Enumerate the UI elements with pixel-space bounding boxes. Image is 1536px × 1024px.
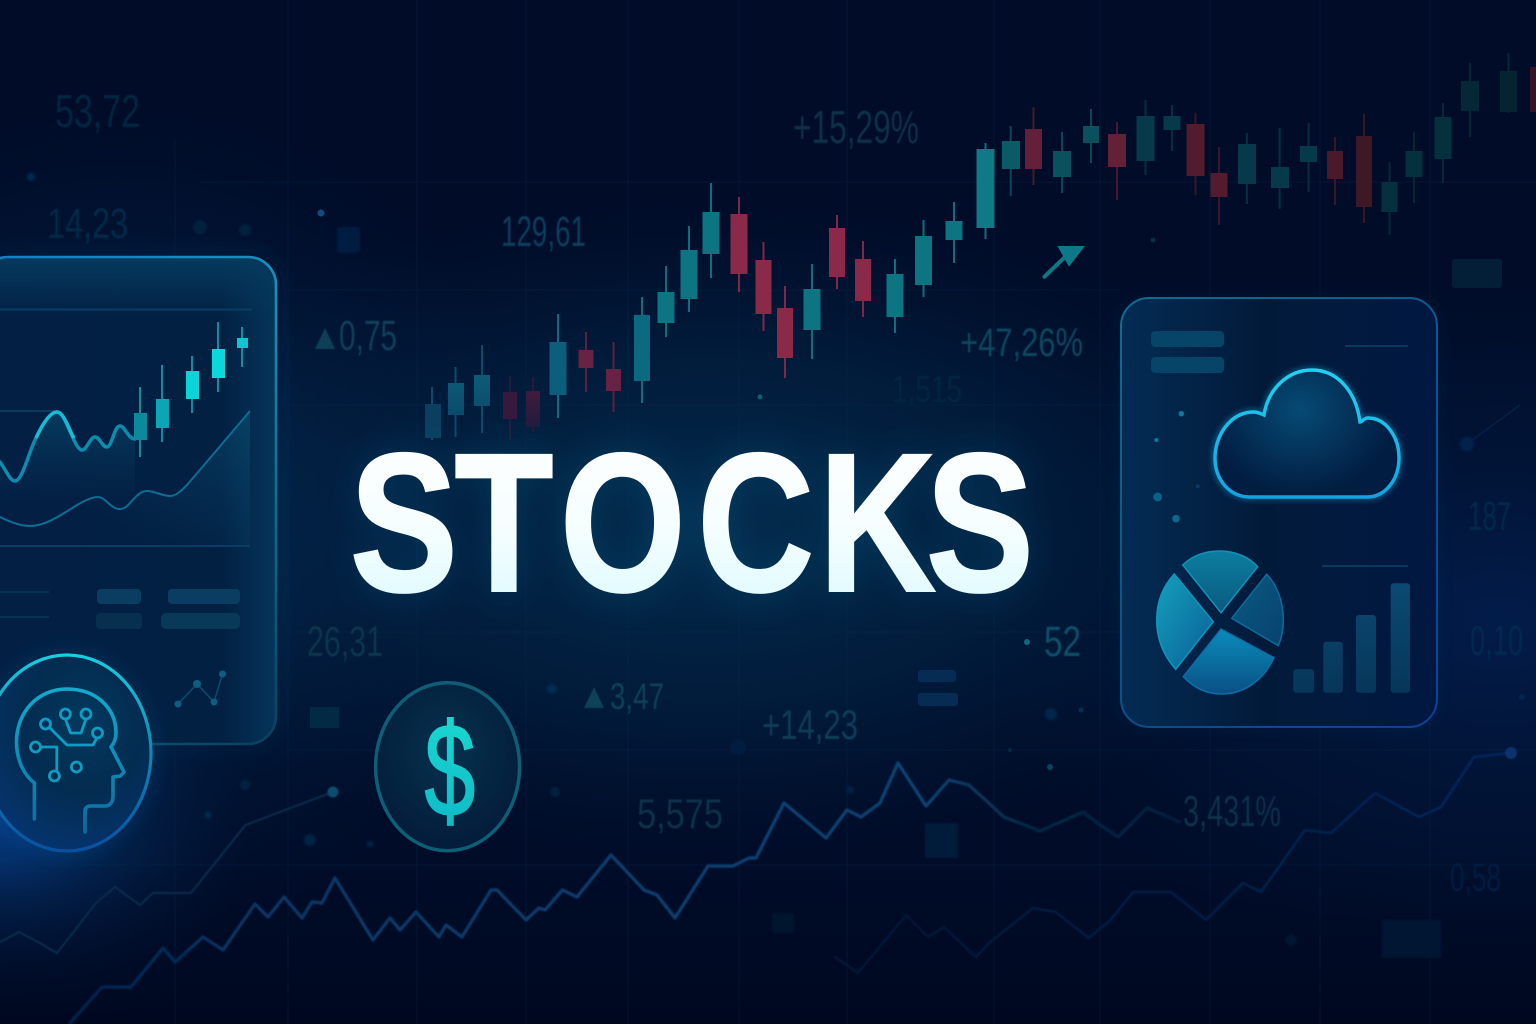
faint market numbers: 5,575	[637, 790, 723, 837]
faint market numbers	[47, 85, 1523, 900]
faint market numbers: 0,58	[1450, 856, 1501, 900]
bar chart	[1293, 583, 1410, 693]
faint market numbers: +15,29%	[793, 101, 919, 153]
faint market numbers: 3,431%	[1183, 787, 1281, 836]
title: STOCKS	[350, 414, 1034, 633]
header bars	[1151, 331, 1408, 566]
faint market numbers: +47,26%	[960, 321, 1083, 365]
candlestick chart	[425, 53, 1536, 440]
area chart	[0, 411, 250, 545]
faint market numbers: 53,72	[55, 85, 140, 137]
pie chart	[1157, 551, 1283, 694]
background line chart	[0, 747, 1517, 1023]
icon: dollar coin: $	[425, 697, 475, 845]
faint decorative dots and blocks	[27, 173, 1525, 958]
faint market numbers: 26,31	[307, 618, 383, 666]
panel dots	[1153, 411, 1200, 522]
faint market numbers: 187	[1468, 493, 1511, 539]
faint market numbers: 1,515	[892, 369, 962, 411]
mini trend	[174, 670, 226, 708]
faint market numbers: +14,23	[762, 701, 858, 748]
faint market numbers: 3,47	[610, 676, 664, 717]
icon: cloud	[1215, 370, 1399, 497]
faint market numbers: 14,23	[47, 200, 128, 248]
icon: dollar coin	[376, 683, 520, 851]
faint market numbers: 0,75	[339, 312, 397, 360]
mini candlesticks	[134, 322, 248, 457]
icon: AI brain head	[0, 645, 162, 861]
faint market numbers: 52	[1044, 618, 1081, 666]
faint market numbers: 129,61	[501, 208, 586, 256]
arrow up-right	[1044, 246, 1085, 277]
panel: left dashboard	[0, 250, 282, 750]
summary bars	[0, 589, 240, 629]
panel: right dashboard	[1120, 297, 1438, 727]
